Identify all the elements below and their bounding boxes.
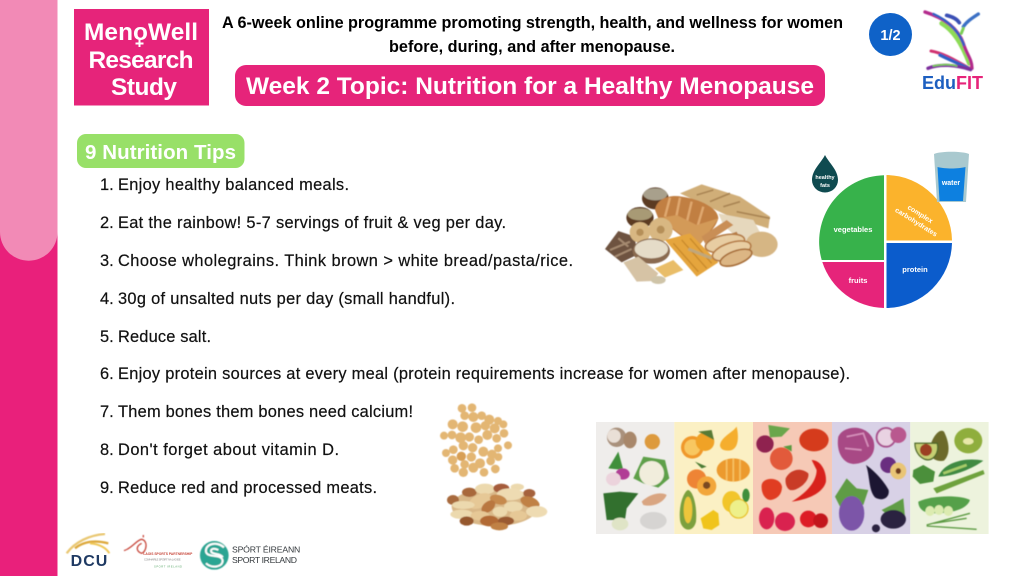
segment: complex carbohydrates: carbohydrates: [893, 207, 938, 239]
logo: Laois Sports Partnership: COMHAIRLE SPÓIRT NA LAOISE: [144, 556, 181, 561]
illustration: rainbow fruit and vegetables: [596, 422, 989, 534]
chart: healthy plate: [812, 152, 969, 308]
segment: vegetables: vegetables: [834, 225, 872, 234]
EduFIT logo: Edu: [922, 73, 956, 93]
segment: fruits: fruits: [849, 276, 867, 285]
logo: Sport Ireland: SPORT IRELAND: [232, 555, 297, 565]
nutrition tips list: Reduce red and processed meats.: [118, 479, 377, 497]
logo: DCU: DCU: [71, 553, 107, 570]
page number badge: 1/2: [880, 28, 901, 44]
segment: complex carbohydrates: [886, 175, 952, 240]
MenoWell Research Study logo: [74, 9, 209, 106]
nutrition tips list: Choose wholegrains. Think brown > white bread/pasta/rice.: [118, 252, 573, 270]
section heading: 9 Nutrition Tips: [77, 134, 244, 168]
illustration: wholegrain foods: [605, 184, 778, 284]
nutrition tips list: Enjoy healthy balanced meals.: [118, 176, 349, 194]
icon: water glass: water: [941, 180, 960, 187]
icon: healthy fats drop: fats: [820, 183, 830, 189]
illustration: chickpeas: [440, 403, 512, 477]
nutrition tips list: 8.: [100, 441, 114, 459]
segment: fruits: [822, 262, 884, 308]
icon: healthy fats drop: [812, 155, 838, 192]
icon: healthy fats drop: healthy: [815, 175, 836, 181]
header description: before, during, and after menopause.: [389, 38, 675, 56]
nutrition tips list: 7.: [100, 403, 114, 421]
page number badge: [869, 13, 912, 56]
panel: red produce: [753, 422, 832, 534]
logo: Laois Sports Partnership: [124, 535, 193, 569]
panel: white vegetables: [596, 422, 674, 534]
header description: [222, 14, 843, 56]
segment: protein: protein: [902, 265, 928, 274]
panel: orange and yellow produce: [674, 422, 753, 534]
logo: Sport Ireland: [200, 541, 300, 570]
nutrition tips list: 2.: [100, 214, 114, 232]
segment: protein: [886, 243, 952, 308]
nutrition tips list: 6.: [100, 365, 114, 383]
week topic banner: Week 2 Topic: Nutrition for a Healthy Menopause: [246, 73, 814, 100]
week topic banner: [235, 65, 825, 106]
footer partner logos: [67, 534, 300, 570]
MenoWell Research Study logo: Research: [88, 47, 194, 74]
logo: DCU: [67, 534, 109, 570]
logo: Laois Sports Partnership: LAOIS SPORTS PARTNERSHIP: [143, 552, 193, 556]
segment: complex carbohydrates: complex: [906, 204, 934, 225]
header description: A 6-week online programme promoting strength, health, and wellness for women: [222, 14, 843, 32]
panel: purple produce: [832, 422, 910, 534]
left sidebar: [0, 0, 58, 576]
logo: Sport Ireland: SPÓRT ÉIREANN: [232, 545, 300, 555]
nutrition tips list: [100, 176, 850, 497]
nutrition tips list: Don't forget about vitamin D.: [118, 441, 339, 459]
nutrition tips list: Reduce salt.: [118, 328, 211, 346]
nutrition tips list: 1.: [100, 176, 114, 194]
icon: EduFIT figure: [925, 12, 978, 70]
EduFIT logo: FIT: [956, 73, 983, 93]
segment: vegetables: [819, 175, 884, 260]
EduFIT logo: [922, 12, 983, 93]
nutrition tips list: 3.: [100, 252, 114, 270]
MenoWell Research Study logo: Study: [111, 74, 177, 101]
nutrition tips list: Them bones them bones need calcium!: [118, 403, 413, 421]
nutrition tips list: 30g of unsalted nuts per day (small handful).: [118, 290, 455, 308]
nutrition tips list: 4.: [100, 290, 114, 308]
nutrition tips list: Enjoy protein sources at every meal (protein requirements increase for women after menopause).: [118, 365, 850, 383]
nutrition tips list: 5.: [100, 328, 114, 346]
nutrition tips list: Eat the rainbow! 5-7 servings of fruit & veg per day.: [118, 214, 506, 232]
nutrition tips list: 9.: [100, 479, 114, 497]
panel: green produce: [910, 422, 989, 534]
MenoWell Research Study logo: MenoWell: [84, 19, 198, 46]
illustration: mixed nuts: [447, 484, 547, 530]
illustrations: produce shapes: [603, 425, 985, 532]
icon: water glass: [934, 152, 969, 202]
logo: Laois Sports Partnership: SPORT IRELAND: [154, 565, 182, 569]
section heading: 9 Nutrition Tips: 9 Nutrition Tips: [85, 141, 236, 164]
